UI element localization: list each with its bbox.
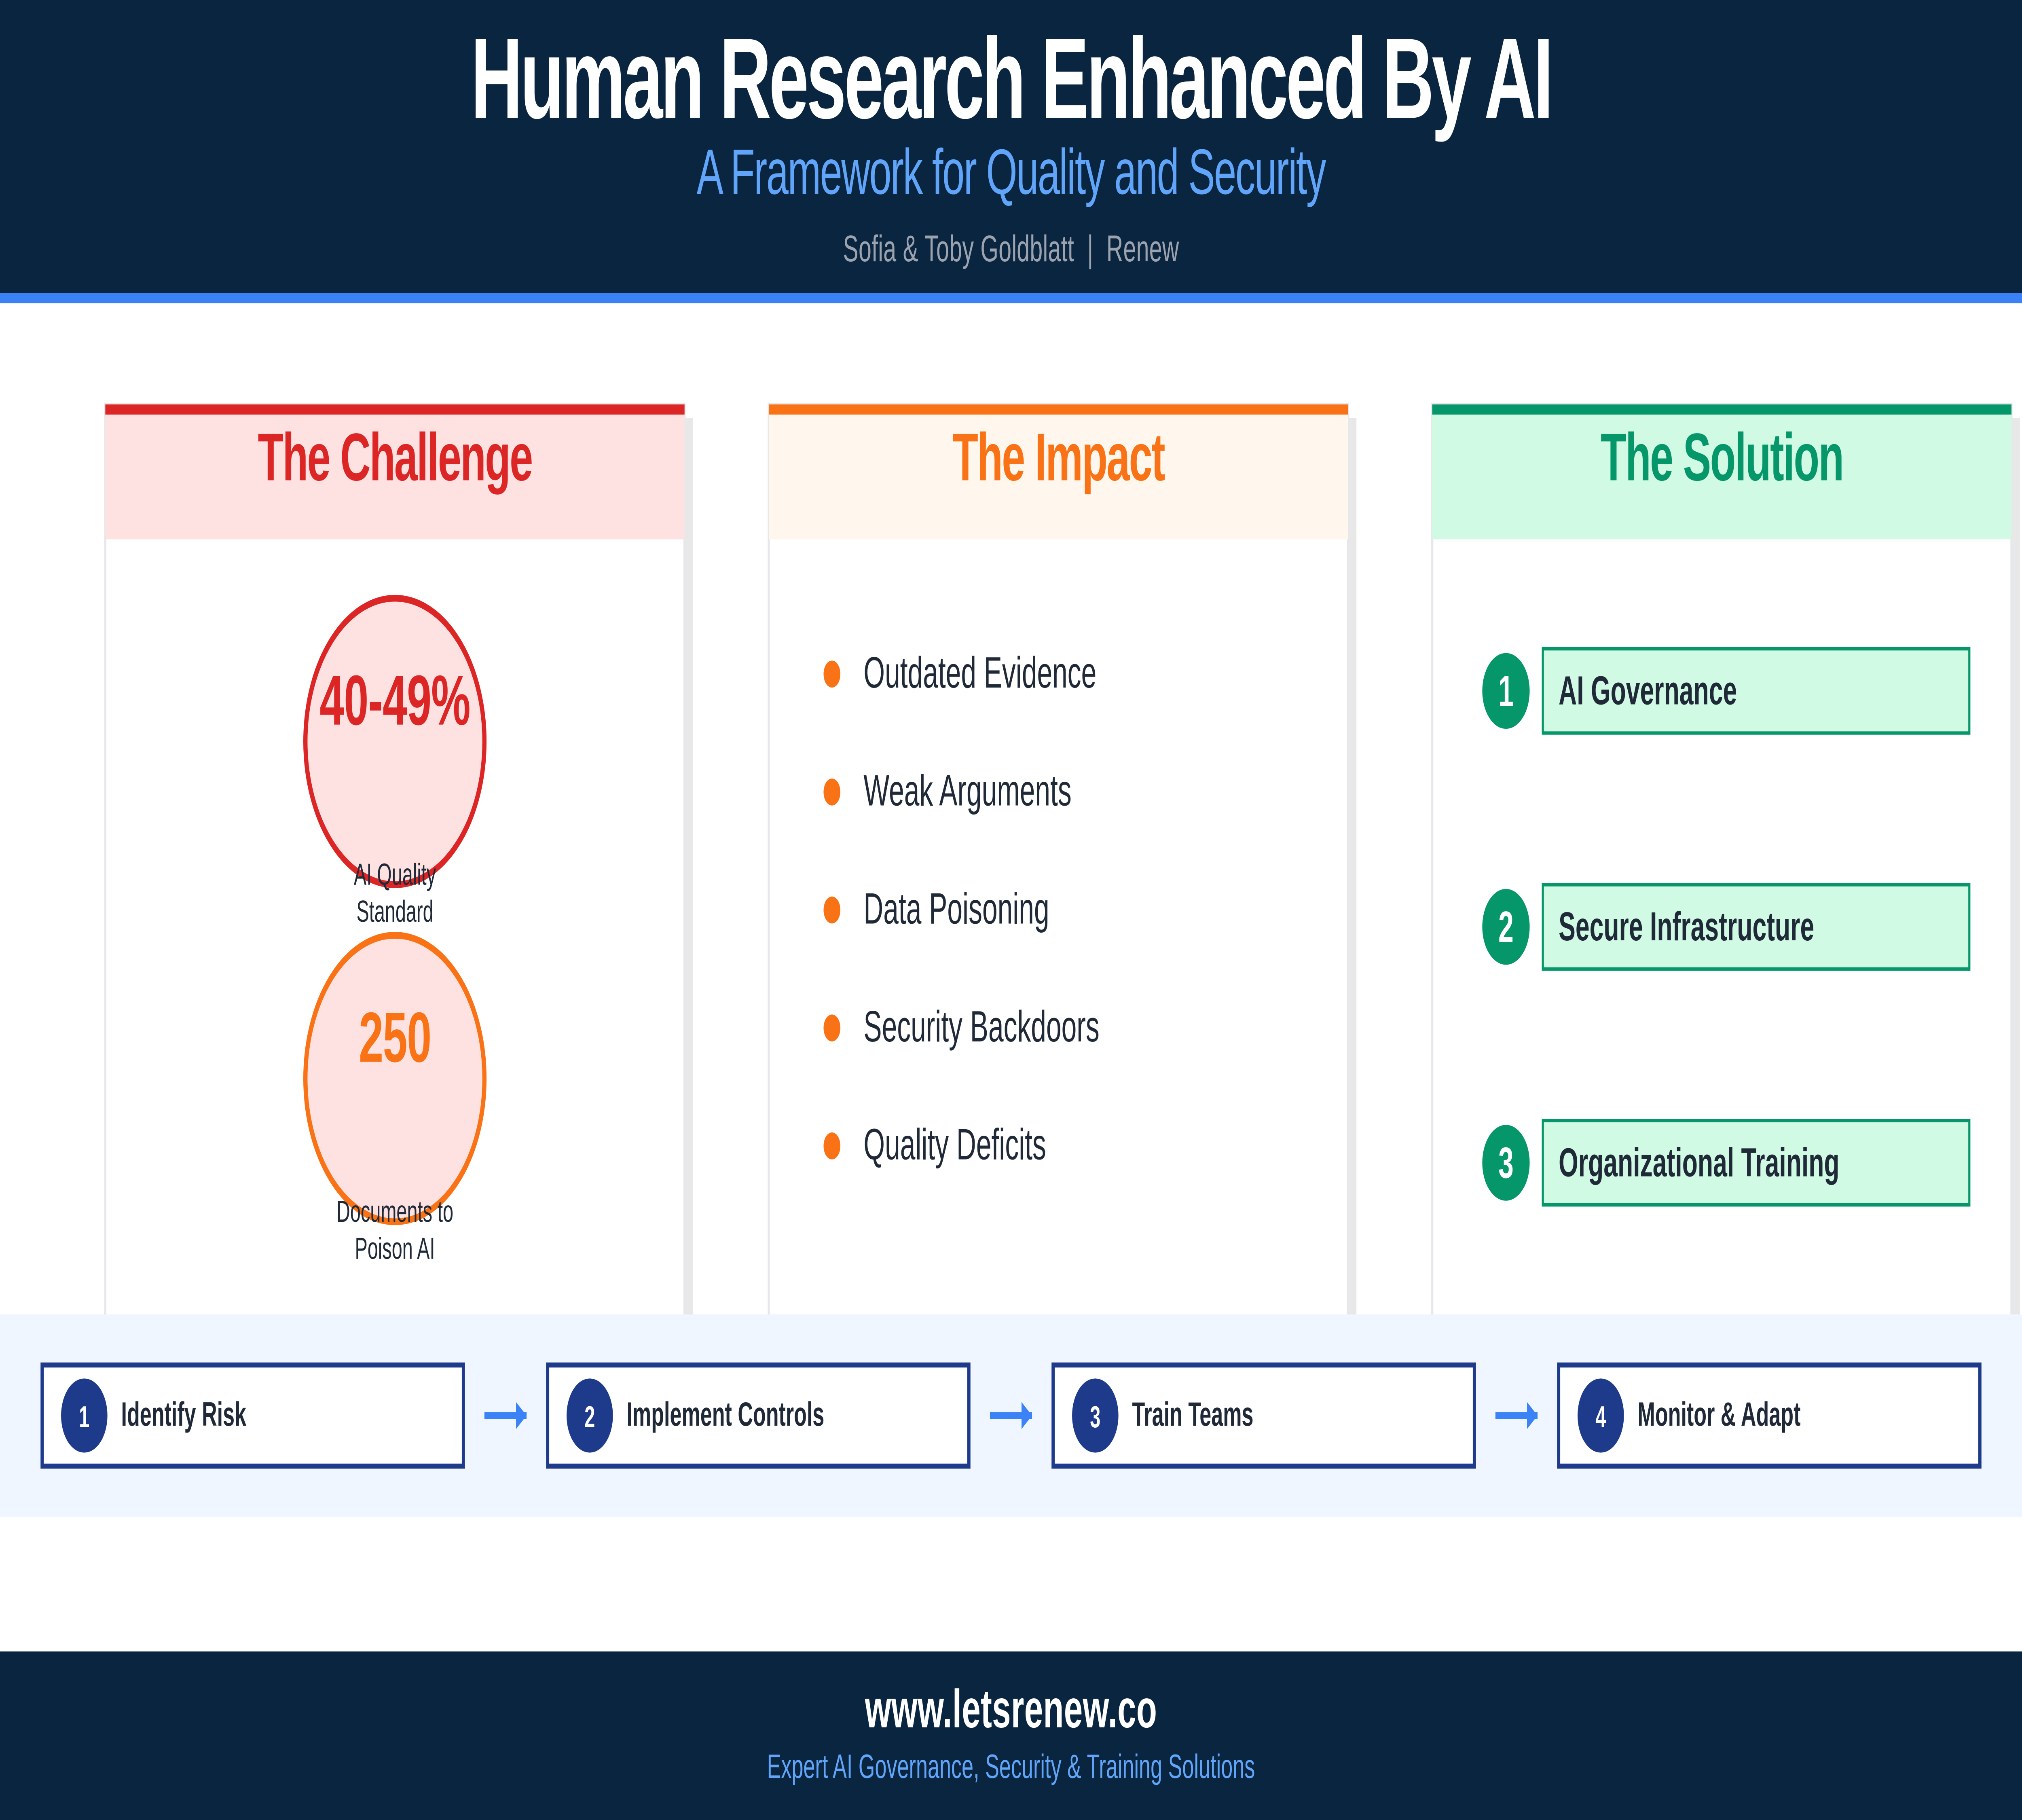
solution 3: organizational training	[1482, 1121, 1969, 1205]
arrow: step 1 to 2	[484, 1402, 527, 1429]
panel: the solution	[1432, 404, 2020, 1362]
process band	[0, 1314, 2022, 1517]
heading: the solution: The Solution	[1601, 420, 1843, 495]
list item: data poisoning: Data Poisoning	[863, 884, 1049, 933]
step 3: train teams: 3	[1090, 1400, 1100, 1434]
subtitle: A Framework for Quality and Security	[697, 135, 1326, 207]
stat: 40-49%	[305, 598, 484, 929]
authors: Sofia & Toby Goldblatt | Renew	[843, 228, 1179, 269]
heading: the challenge: The Challenge	[258, 420, 532, 495]
stat: 40-49%: 40-49%	[319, 660, 470, 740]
solution 1: ai governance	[1482, 649, 1969, 733]
stat: 40-49%: Standard	[356, 895, 434, 929]
step 1: identify risk: 1	[79, 1400, 89, 1434]
arrow: step 3 to 4	[1495, 1402, 1538, 1429]
solution 3: organizational training: 3	[1498, 1139, 1514, 1187]
stat: 250	[305, 935, 484, 1266]
list item: outdated evidence: Outdated Evidence	[863, 648, 1096, 697]
solution 1: ai governance: 1	[1498, 667, 1514, 716]
title: Human Research Enhanced By AI	[471, 15, 1551, 143]
step 1: identify risk: Identify Risk	[121, 1395, 246, 1433]
step 4: monitor and adapt: Monitor & Adapt	[1637, 1395, 1800, 1433]
website: www.letsrenew.co	[865, 1678, 1157, 1739]
step 1: identify risk	[42, 1365, 463, 1466]
solution 2: secure infrastructure: 2	[1498, 903, 1514, 952]
solution 1: ai governance: AI Governance	[1559, 668, 1737, 713]
list item: weak arguments: Weak Arguments	[863, 766, 1072, 815]
footer	[0, 1651, 2022, 1820]
step 4: monitor and adapt: 4	[1595, 1400, 1606, 1434]
solution 2: secure infrastructure: Secure Infrastructure	[1559, 904, 1814, 949]
solution 2: secure infrastructure	[1482, 885, 1969, 969]
stat: 250: 250	[359, 998, 431, 1077]
panel: the challenge	[105, 404, 693, 1362]
step 3: train teams: Train Teams	[1132, 1395, 1253, 1433]
step 2: implement controls: Implement Controls	[626, 1395, 824, 1433]
tagline: Expert AI Governance, Security & Training Solutions	[767, 1747, 1255, 1785]
step 4: monitor and adapt	[1559, 1365, 1980, 1466]
list item: quality deficits: Quality Deficits	[863, 1120, 1046, 1169]
heading: the impact: The Impact	[952, 420, 1165, 495]
stat: 250: Documents to	[336, 1195, 453, 1229]
step 2: implement controls	[548, 1365, 969, 1466]
panel: the impact	[769, 404, 1356, 1362]
arrow: step 2 to 3	[990, 1402, 1032, 1429]
step 3: train teams	[1053, 1365, 1474, 1466]
header banner	[0, 0, 2022, 303]
stat: 250: Poison AI	[355, 1232, 435, 1266]
stat: 40-49%: AI Quality	[354, 857, 436, 891]
step 2: implement controls: 2	[584, 1400, 595, 1434]
list item: security backdoors: Security Backdoors	[863, 1002, 1100, 1051]
solution 3: organizational training: Organizational Training	[1559, 1140, 1840, 1185]
